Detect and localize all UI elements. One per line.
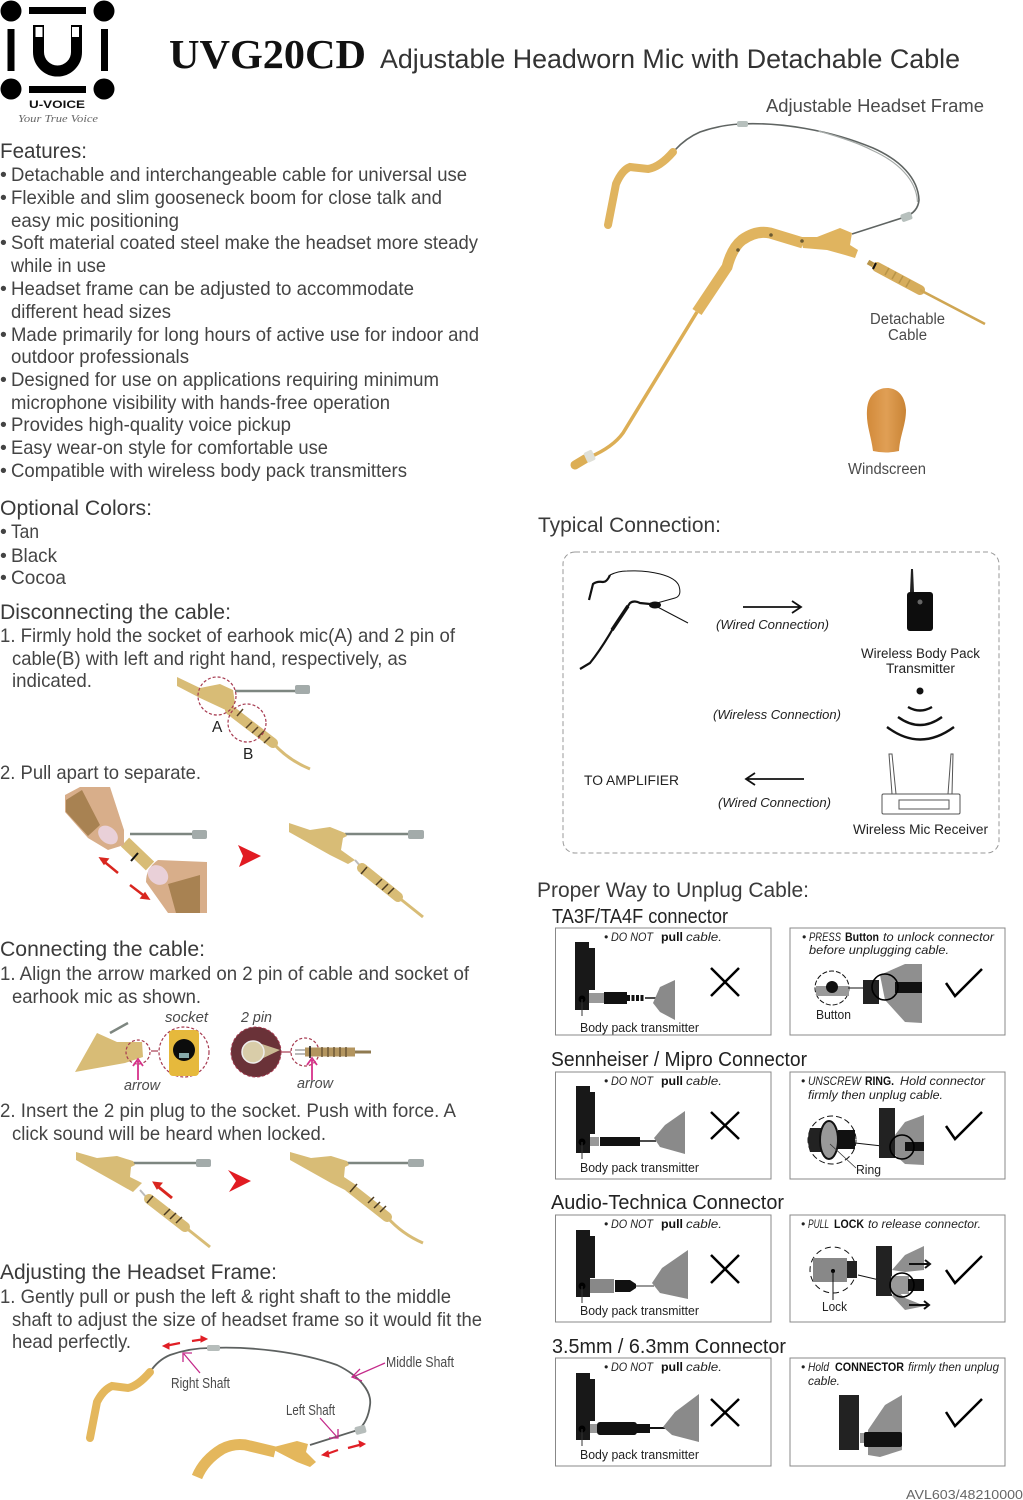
panel: Audio-Technica pull lock xyxy=(790,1215,1005,1322)
text block: optional colors: • xyxy=(0,545,7,567)
text block: features: Made primarily for long hours of active use for indoor and xyxy=(11,324,479,346)
panel: 3.5mm hold connector: cable. xyxy=(808,1374,840,1388)
illustration: main headset with detachable cable and windscreen: Adjustable Headset Frame xyxy=(766,96,984,116)
icon: body pack transmitter xyxy=(907,569,933,631)
text block: features: • xyxy=(0,164,7,186)
illustration: main headset with detachable cable and windscreen: Detachable xyxy=(870,311,945,328)
panel: Audio-Technica do not pull: cable. xyxy=(686,1217,722,1231)
text block: adjusting the headset frame: shaft to adjust the size of headset frame so it would fit the xyxy=(12,1309,482,1331)
arrow: red chevron xyxy=(228,1170,251,1192)
illustration: socket A and plug B: A xyxy=(212,719,223,736)
arrow: to transmitter xyxy=(743,601,801,613)
panel: TA3F do not pull: DO NOT xyxy=(611,930,654,944)
text block: features: Soft material coated steel make the headset more steady xyxy=(11,232,478,254)
panel: TA3F press button: Button xyxy=(845,930,879,944)
icon: black headset xyxy=(580,571,688,669)
text block: optional colors: Cocoa xyxy=(11,567,66,589)
logo: U-Voice xyxy=(0,0,114,125)
label: amplifier: TO AMPLIFIER xyxy=(584,773,679,788)
icon: wireless signal xyxy=(887,688,954,740)
illustration: headset frame shafts: Left Shaft xyxy=(286,1403,335,1419)
text block: optional colors xyxy=(0,497,152,589)
panel: Sennheiser do not pull: DO NOT xyxy=(611,1074,654,1088)
panel: 3.5mm do not pull: Body pack transmitter xyxy=(580,1448,699,1462)
text block: connecting the cable: 2. Insert the 2 pin plug to the socket. Push with force. A xyxy=(0,1100,456,1122)
panel: Sennheiser unscrew ring: Ring xyxy=(856,1163,881,1177)
text block: features: Easy wear-on style for comfortable use xyxy=(11,437,328,459)
text block: adjusting the headset frame: head perfectly. xyxy=(12,1331,131,1353)
text block: disconnecting the cable: cable(B) with left and right hand, respectively, as xyxy=(12,648,407,670)
illustration: inserting plug into socket xyxy=(76,1152,211,1247)
panel: 3.5mm do not pull: pull xyxy=(661,1360,683,1374)
panel: 3.5mm hold connector: Hold xyxy=(808,1360,829,1374)
title: UVG20CD xyxy=(169,31,366,77)
panel: Audio-Technica pull lock: LOCK xyxy=(834,1217,864,1231)
panel: TA3F press button xyxy=(790,928,1005,1035)
panel: 3.5mm hold connector xyxy=(790,1358,1005,1466)
text block: features: • xyxy=(0,187,7,209)
text block: features: • xyxy=(0,278,7,300)
text block: optional colors: • xyxy=(0,567,7,589)
panel: 3.5mm do not pull: DO NOT xyxy=(611,1360,654,1374)
label: receiver: Wireless Mic Receiver xyxy=(853,822,988,837)
panel: Sennheiser do not pull xyxy=(556,1072,771,1179)
text block: connecting the cable: Connecting the cable: xyxy=(0,938,205,961)
panel: Sennheiser do not pull: Body pack transmitter xyxy=(580,1161,699,1175)
illustration: socket and arrow mark: socket xyxy=(165,1010,209,1026)
panel: TA3F do not pull: cable. xyxy=(686,930,722,944)
illustration: headset frame shafts xyxy=(90,1336,454,1477)
text block: optional colors: Optional Colors: xyxy=(0,497,152,520)
panel: Sennheiser unscrew ring: • xyxy=(801,1074,805,1088)
panel: Sennheiser do not pull: pull xyxy=(661,1074,683,1088)
illustration: 2 pin plug and arrow mark: arrow xyxy=(297,1076,335,1092)
heading: 3.5mm / 6.3mm connector: 3.5mm / 6.3mm Connector xyxy=(552,1336,786,1358)
panel: Audio-Technica do not pull xyxy=(556,1215,771,1322)
panel: Audio-Technica do not pull: DO NOT xyxy=(611,1217,654,1231)
panel: TA3F do not pull: pull xyxy=(661,930,683,944)
panel: Audio-Technica pull lock: PULL xyxy=(808,1217,829,1231)
panel: Audio-Technica pull lock: Lock xyxy=(822,1300,848,1314)
heading: Audio-Technica connector: Audio-Technica Connector xyxy=(551,1192,784,1214)
panel: 3.5mm hold connector: CONNECTOR xyxy=(835,1360,904,1374)
label: transmitter: Wireless Body Pack xyxy=(861,646,980,661)
title: Adjustable Headworn Mic with Detachable Cable xyxy=(380,44,960,74)
heading: TA3F/TA4F connector: TA3F/TA4F connector xyxy=(552,906,728,928)
panel: Sennheiser do not pull: cable. xyxy=(686,1074,722,1088)
heading: typical connection: Typical Connection: xyxy=(538,514,721,537)
icon: wireless receiver xyxy=(882,754,960,814)
text block: optional colors: Black xyxy=(11,545,57,567)
text block: features: • xyxy=(0,437,7,459)
panel: Sennheiser unscrew ring: firmly then unplug cable. xyxy=(808,1088,943,1102)
text block: adjusting the headset frame: 1. Gently pull or push the left & right shaft to the middle xyxy=(0,1286,451,1308)
text block: connecting the cable xyxy=(0,938,470,1145)
text block: adjusting the headset frame xyxy=(0,1261,482,1353)
text block: features: Features: xyxy=(0,140,87,163)
panel: 3.5mm hold connector: firmly then unplug xyxy=(908,1360,999,1374)
text block: features: microphone visibility with hands-free operation xyxy=(11,392,390,414)
illustration: headset frame shafts: Middle Shaft xyxy=(386,1355,454,1371)
text block: features: Flexible and slim gooseneck boom for close talk and xyxy=(11,187,442,209)
panel: Sennheiser unscrew ring: Hold connector xyxy=(900,1074,986,1088)
text block: optional colors: • xyxy=(0,521,7,543)
panel: 3.5mm do not pull xyxy=(556,1358,771,1466)
text block: disconnecting the cable: Disconnecting the cable: xyxy=(0,601,231,624)
illustration: 2 pin plug and arrow mark xyxy=(231,1010,371,1092)
panel: TA3F press button: to unlock connector xyxy=(883,930,995,944)
title xyxy=(169,31,960,77)
text block: features: while in use xyxy=(10,255,106,277)
panel: Audio-Technica do not pull: Body pack transmitter xyxy=(580,1304,699,1318)
illustration: socket A and plug B: B xyxy=(243,746,253,763)
panel: 3.5mm do not pull: • xyxy=(604,1360,608,1374)
panel: Audio-Technica do not pull: • xyxy=(604,1217,608,1231)
illustration: separated connector xyxy=(289,823,424,917)
arrow: red chevron xyxy=(238,845,261,867)
text block: disconnecting the cable: indicated. xyxy=(12,670,92,692)
label: wired connection top: (Wired Connection) xyxy=(716,617,829,632)
text block: features: • xyxy=(0,414,7,436)
panel: typical connection diagram xyxy=(563,552,999,853)
text block: features: Detachable and interchangeable cable for universal use xyxy=(11,164,467,186)
text block: features: easy mic positioning xyxy=(11,210,179,232)
label: transmitter xyxy=(861,646,980,676)
illustration: connected plug xyxy=(290,1152,424,1243)
panel: TA3F do not pull: Body pack transmitter xyxy=(580,1021,699,1035)
label: wireless connection: (Wireless Connection) xyxy=(713,707,841,722)
illustration: socket and arrow mark xyxy=(75,1010,209,1094)
text block: connecting the cable: click sound will be heard when locked. xyxy=(12,1123,326,1145)
panel: Sennheiser unscrew ring xyxy=(790,1072,1005,1179)
text block: optional colors: Tan xyxy=(11,521,39,543)
illustration: main headset with detachable cable and windscreen: Cable xyxy=(888,327,927,344)
arrow: to amplifier xyxy=(746,773,804,785)
text block: features xyxy=(0,140,479,482)
text block: features: different head sizes xyxy=(11,301,171,323)
text block: adjusting the headset frame: Adjusting the Headset Frame: xyxy=(0,1261,277,1284)
text block: features: Compatible with wireless body pack transmitters xyxy=(11,460,407,482)
illustration: main headset with detachable cable and windscreen xyxy=(575,96,985,478)
illustration: socket A and plug B xyxy=(177,677,310,769)
label: wired connection bottom: (Wired Connection) xyxy=(718,795,831,810)
panel: Audio-Technica do not pull: pull xyxy=(661,1217,683,1231)
text block: features: • xyxy=(0,324,7,346)
panel: Audio-Technica pull lock: to release connector. xyxy=(868,1217,981,1231)
illustration: headset frame shafts: Right Shaft xyxy=(171,1376,230,1392)
text block: disconnecting the cable: 1. Firmly hold the socket of earhook mic(A) and 2 pin of xyxy=(0,625,456,647)
text block: disconnecting the cable: 2. Pull apart to separate. xyxy=(0,762,201,784)
illustration: 2 pin plug and arrow mark: 2 pin xyxy=(240,1010,272,1026)
panel: TA3F do not pull xyxy=(556,928,771,1035)
text block: features: • xyxy=(0,460,7,482)
panel: Sennheiser do not pull: • xyxy=(604,1074,608,1088)
panel: TA3F press button: • xyxy=(802,930,806,944)
logo: U-Voice: Your True Voice xyxy=(18,114,99,125)
illustration: socket and arrow mark: arrow xyxy=(124,1078,162,1094)
text block: features: outdoor professionals xyxy=(11,346,189,368)
panel: TA3F press button: PRESS xyxy=(809,930,841,944)
text block: features: Provides high-quality voice pickup xyxy=(11,414,291,436)
illustration: main headset with detachable cable and windscreen: Windscreen xyxy=(848,461,926,478)
heading: Sennheiser / Mipro connector: Sennheiser / Mipro Connector xyxy=(551,1049,807,1071)
text block: features: • xyxy=(0,369,7,391)
panel: Audio-Technica pull lock: • xyxy=(801,1217,805,1231)
text block: features: • xyxy=(0,232,7,254)
panel: TA3F do not pull: • xyxy=(604,930,608,944)
text block: features: Designed for use on applications requiring minimum xyxy=(11,369,439,391)
text block: connecting the cable: earhook mic as shown. xyxy=(12,986,201,1008)
panel: TA3F press button: Button xyxy=(816,1008,851,1022)
panel: Sennheiser unscrew ring: RING. xyxy=(865,1074,894,1088)
text block: features: Headset frame can be adjusted to accommodate xyxy=(11,278,414,300)
text block: connecting the cable: 1. Align the arrow marked on 2 pin of cable and socket of xyxy=(0,963,470,985)
heading: proper way to unplug cable: Proper Way to Unplug Cable: xyxy=(537,879,809,902)
photo: fingers pulling connector apart xyxy=(65,787,207,913)
panel: 3.5mm do not pull: cable. xyxy=(686,1360,722,1374)
text block: disconnecting the cable xyxy=(0,601,456,784)
panel: Sennheiser unscrew ring: UNSCREW xyxy=(808,1074,862,1088)
panel: 3.5mm hold connector: • xyxy=(801,1360,805,1374)
logo: U-Voice: U-VOICE xyxy=(29,99,85,111)
panel: TA3F press button: before unplugging cable. xyxy=(809,943,949,957)
label: transmitter: Transmitter xyxy=(886,661,956,676)
